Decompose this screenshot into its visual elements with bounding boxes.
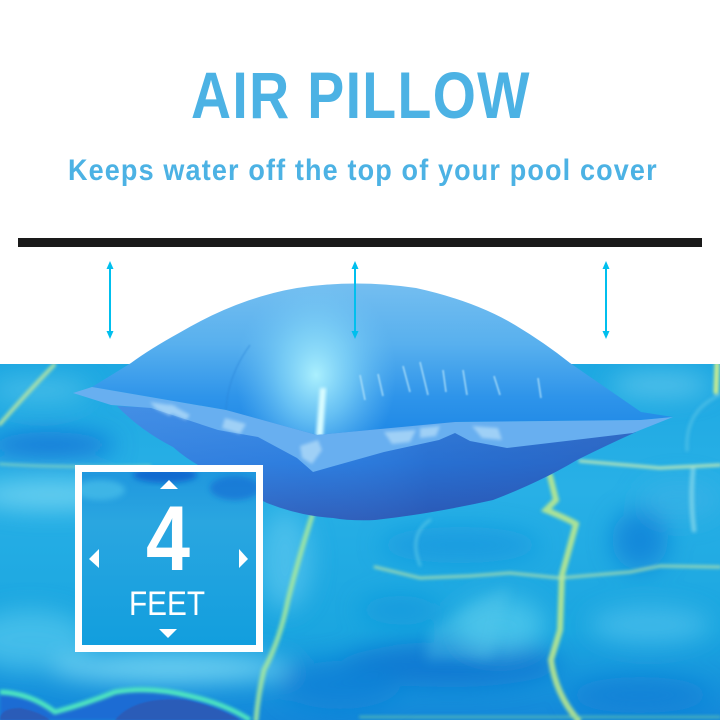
panel: pool water background xyxy=(0,364,720,720)
pool cover bar xyxy=(18,238,702,247)
arrow: right gap xyxy=(602,261,610,339)
icon: down triangle xyxy=(159,629,177,638)
bottom wave caustic xyxy=(0,690,250,720)
size number: 4 xyxy=(146,487,190,590)
title: AIR PILLOW xyxy=(191,58,530,132)
icon: up triangle xyxy=(160,480,178,489)
pillow top xyxy=(73,284,673,435)
icon: left triangle xyxy=(89,549,99,568)
icon: right triangle xyxy=(239,549,248,568)
size unit: FEET xyxy=(129,585,205,623)
arrow: middle gap xyxy=(352,261,358,339)
arrow: left gap xyxy=(106,261,114,339)
pillow hem xyxy=(73,387,673,472)
panel: air pillow xyxy=(73,275,673,520)
subtitle: Keeps water off the top of your pool cover xyxy=(68,154,657,187)
pillow underside xyxy=(117,406,636,520)
callout: 4 feet size badge xyxy=(75,467,260,648)
